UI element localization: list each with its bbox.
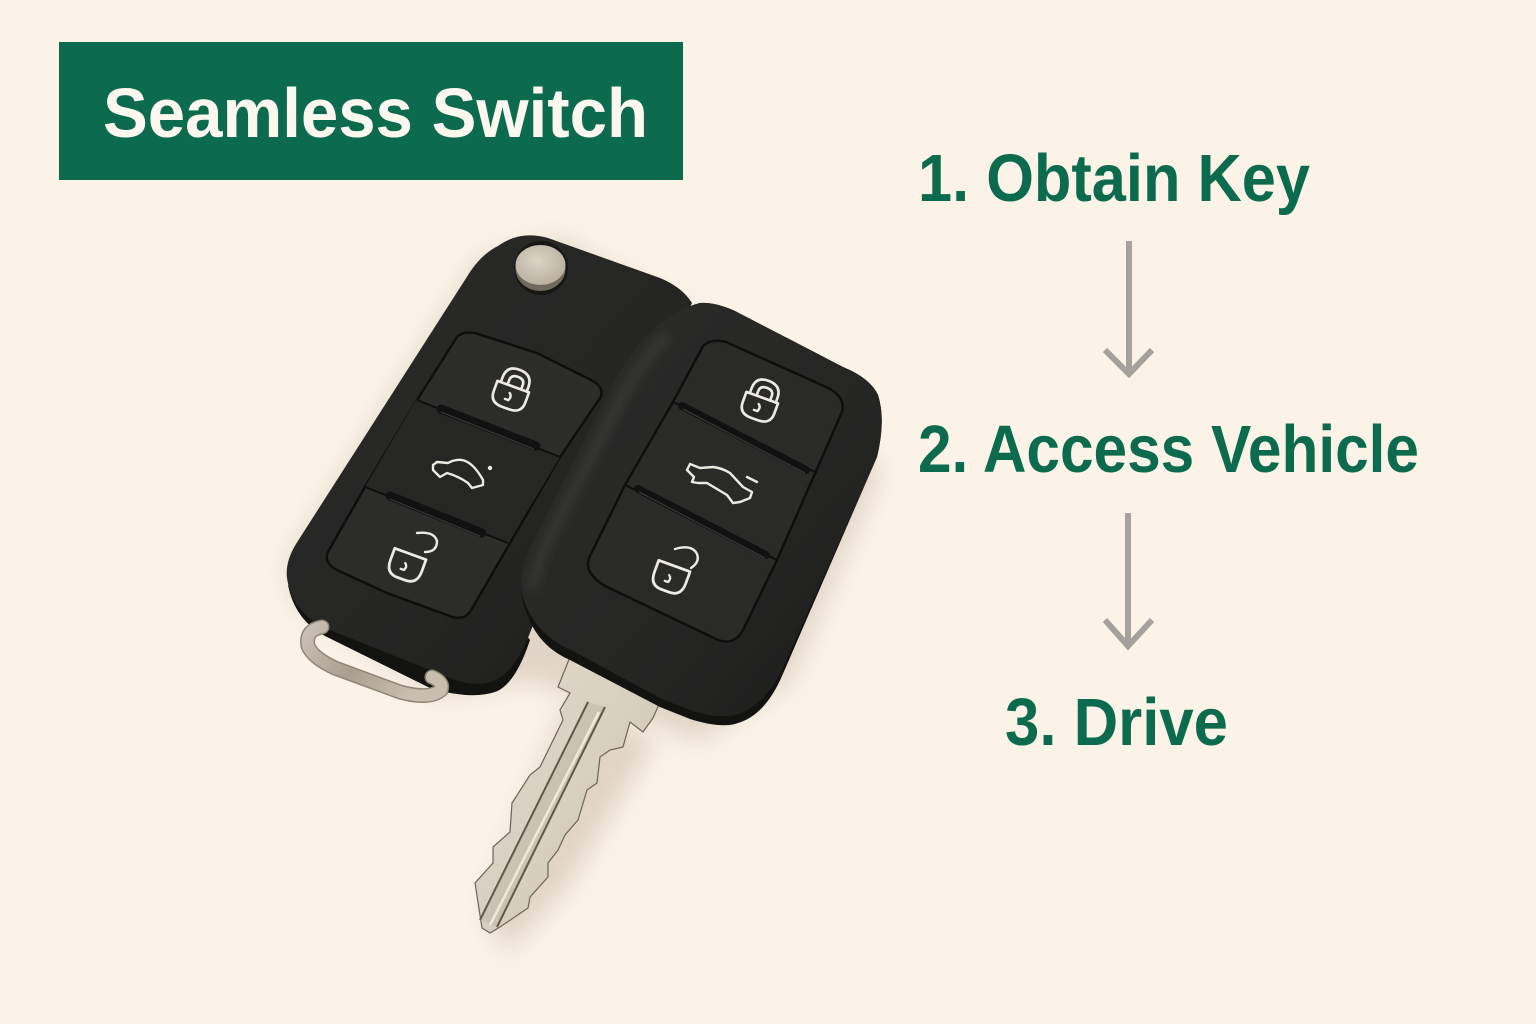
- cast shadows: [290, 240, 880, 953]
- blade groove: [480, 702, 605, 927]
- key fob illustration: [287, 235, 882, 953]
- right panel dividers: [625, 402, 817, 560]
- icon: unlocked padlock: [650, 547, 698, 597]
- title text: Seamless Switch: [103, 74, 648, 152]
- middle button tone: [365, 400, 560, 543]
- left fob body: [287, 235, 692, 684]
- step 1 label: 1. Obtain Key: [918, 141, 1310, 216]
- title banner: [59, 42, 683, 180]
- icon: car with open trunk: [687, 464, 757, 503]
- icon: unlocked padlock: [386, 533, 437, 585]
- step 2 label: 2. Access Vehicle: [918, 412, 1419, 487]
- right fob body: [521, 303, 882, 716]
- right fob highlight: [532, 335, 668, 590]
- icon: locked padlock: [490, 364, 535, 414]
- step 3 label: 3. Drive: [1005, 685, 1228, 760]
- right fob rim: [521, 303, 882, 725]
- arrow: step 2 to step 3: [1105, 513, 1152, 646]
- arrow: step 1 to step 2: [1105, 241, 1152, 374]
- left key fob: [287, 235, 692, 695]
- icon: car with open trunk: [433, 460, 491, 488]
- flip key blade: [475, 657, 660, 933]
- icon: locked padlock: [739, 375, 784, 425]
- right key fob: [521, 303, 882, 725]
- key ring loop: [308, 627, 442, 696]
- left button panel: [327, 333, 601, 618]
- left panel dividers: [365, 400, 560, 543]
- metal pin: [514, 241, 568, 295]
- left fob rim: [288, 585, 530, 695]
- right button panel: [588, 341, 843, 642]
